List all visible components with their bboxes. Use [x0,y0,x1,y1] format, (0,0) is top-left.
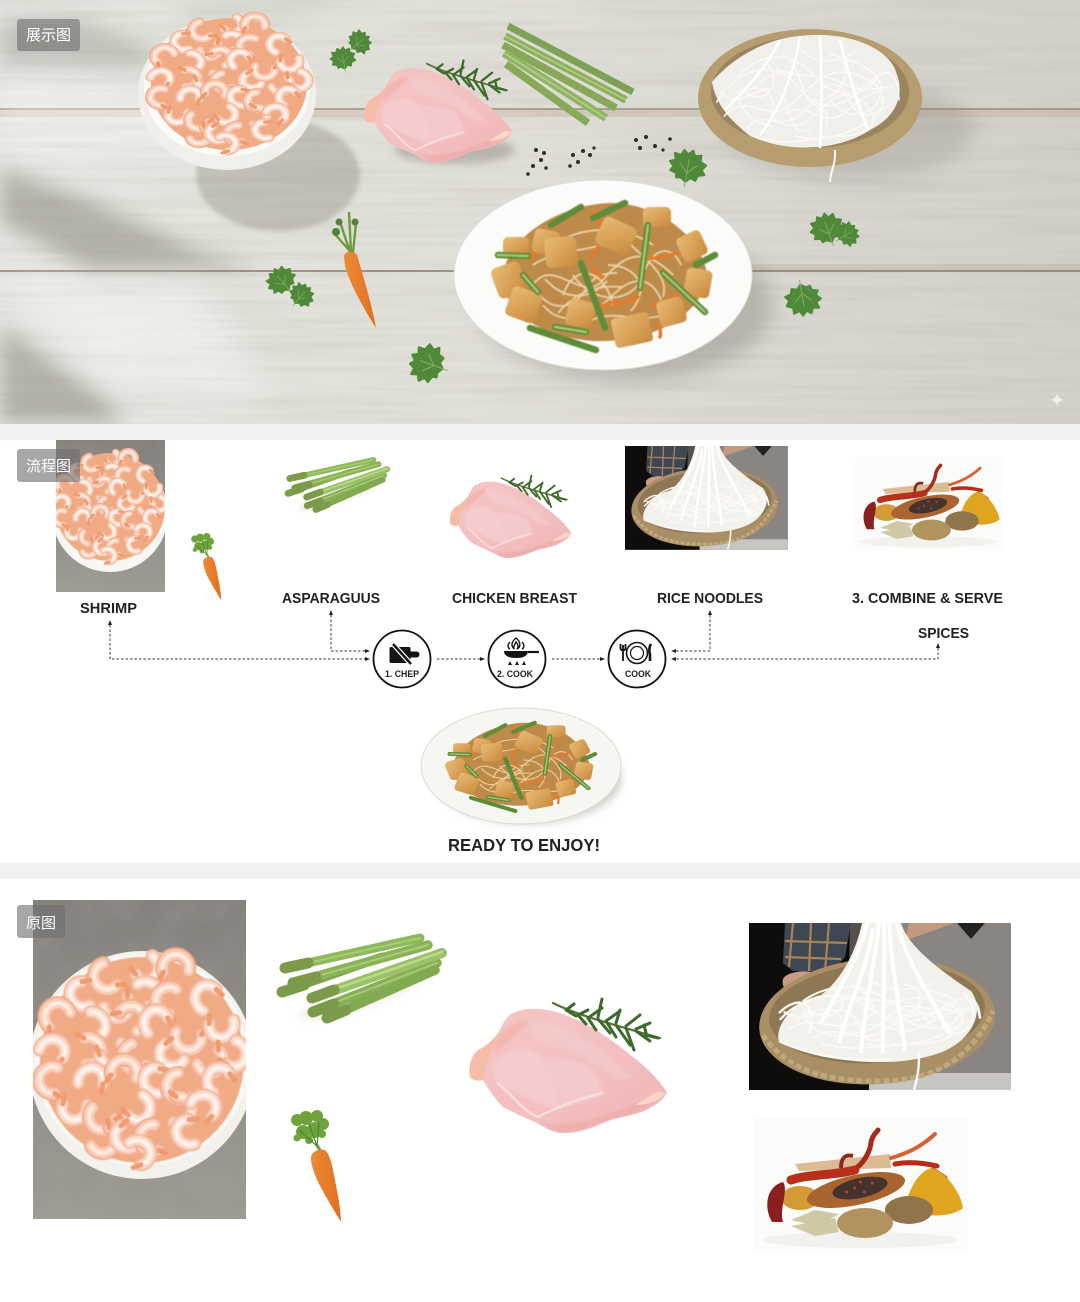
badge: original: 原图 [26,915,56,932]
divider band top [0,424,1080,440]
sparkle icon: ✦ [1049,390,1065,412]
spices small [855,457,1003,549]
step icon: cook pan: 2. COOK [497,669,533,680]
ingredient labels: SPICES [918,625,969,642]
divider band bottom [0,863,1080,879]
shrimp photo small [52,440,169,592]
badge: showcase [17,19,80,51]
ingredient labels: 3. COMBINE & SERVE [852,590,1003,607]
step icon: plate cutlery: COOK [625,669,651,680]
badge: showcase: 展示图 [26,27,71,44]
ready caption: READY TO ENJOY! [448,835,600,855]
badge: original [17,905,65,938]
step icon: chop: 1. CHEP [385,669,420,680]
noodle basket photo large [749,923,1011,1092]
ingredient labels: SHRIMP [80,600,137,617]
carrot large [291,1110,341,1222]
ingredient labels: RICE NOODLES [657,590,763,607]
finished noodle dish [454,180,773,381]
cilantro sprig near bowl [329,26,375,74]
step icon: cook pan [488,630,546,688]
badge: flow [17,449,80,482]
hero photo panel [0,0,1080,424]
ingredient labels: CHICKEN BREAST [452,590,577,607]
shrimp photo large [29,900,255,1219]
original assets panel [29,900,1011,1251]
noodle basket photo small [625,446,788,551]
carrot [332,212,376,328]
peppercorns [526,135,672,176]
step icon: chop [374,630,430,688]
flow arrows [108,610,940,661]
shrimp bowl [138,13,360,231]
noodle basket [698,29,975,182]
chicken large [469,999,667,1133]
spices large [755,1118,968,1251]
cilantro leaves on table [262,147,863,389]
badge: flow: 流程图 [26,458,71,475]
asparagus small [288,460,387,515]
asparagus bunch [503,26,633,123]
ingredient labels: ASPARAGUUS [282,590,380,607]
asparagus large [282,938,442,1027]
wood table background [0,0,1080,424]
step icon: plate cutlery [608,630,666,688]
chicken small [450,476,571,558]
process panel [52,440,1003,855]
finished dish small [421,708,622,824]
ingredient labels [80,590,1003,642]
chicken breast [364,61,515,164]
carrot small [191,533,221,600]
